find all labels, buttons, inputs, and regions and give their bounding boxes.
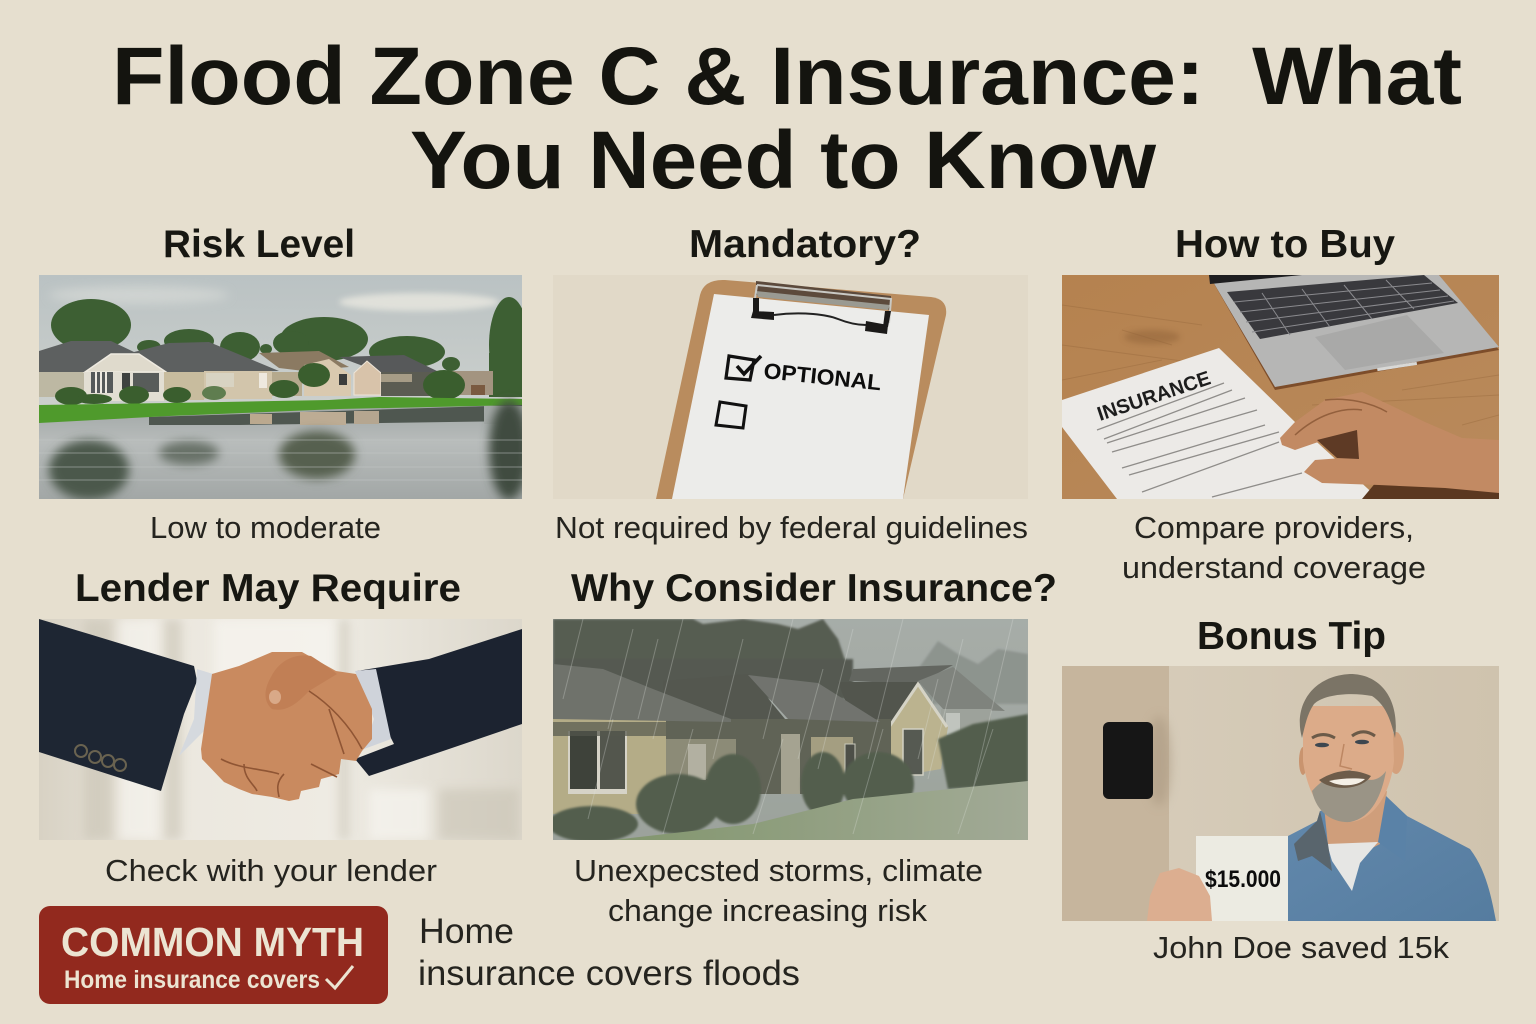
caption: not required: Not required by federal guidelines xyxy=(555,510,1028,545)
heading: mandatory: Mandatory? xyxy=(689,223,921,266)
heading: bonus tip: Bonus Tip xyxy=(1197,615,1386,658)
photo: lakeside houses xyxy=(39,275,522,499)
right sleeve xyxy=(355,629,522,776)
lawn xyxy=(39,397,522,423)
text: myth explanation: insurance covers floods xyxy=(418,954,800,993)
left sleeve xyxy=(39,619,213,791)
label: insurance: INSURANCE xyxy=(1095,367,1213,426)
photo: handshake xyxy=(39,619,522,840)
title xyxy=(112,31,1462,206)
cuff buttons xyxy=(75,745,126,771)
hand xyxy=(1147,868,1212,921)
title: Flood Zone C & Insurance: What xyxy=(112,31,1462,122)
left house xyxy=(553,664,731,814)
panel: risk level xyxy=(39,223,529,545)
background trees xyxy=(553,619,1028,704)
label: optional: OPTIONAL xyxy=(762,358,882,395)
photo: storm over houses xyxy=(553,619,1028,840)
clip xyxy=(751,281,891,334)
clipboard board xyxy=(656,280,946,499)
panel: bonus tip xyxy=(1062,615,1499,965)
man xyxy=(1288,674,1496,921)
face xyxy=(1303,706,1394,822)
reflections at bank xyxy=(149,405,522,425)
heading: how to buy: How to Buy xyxy=(1175,223,1395,266)
icon: check mark xyxy=(326,966,353,988)
photo: man with flood sensor and check xyxy=(1062,666,1499,921)
panel: why consider insurance xyxy=(548,567,1057,928)
laptop xyxy=(1209,275,1499,390)
checked box xyxy=(726,356,761,380)
photo: clipboard optional xyxy=(656,280,946,499)
wall device xyxy=(1103,722,1153,799)
clasped hands xyxy=(201,652,372,801)
panel: mandatory xyxy=(553,223,1028,545)
shirt xyxy=(1288,796,1496,921)
callout: common myth badge xyxy=(39,906,388,1004)
eyes xyxy=(1315,740,1369,747)
heading: why consider insurance: Why Consider Insurance? xyxy=(571,567,1057,610)
rain xyxy=(563,619,1013,834)
water reflections xyxy=(49,400,529,500)
shrubs xyxy=(55,363,465,405)
right background house xyxy=(838,665,1005,739)
caption: compare providers: Compare providers, xyxy=(1134,510,1414,545)
caption: check with your lender: Check with your lender xyxy=(105,853,437,888)
heading: lender may require: Lender May Require xyxy=(75,567,461,610)
heading: risk level: Risk Level xyxy=(163,223,355,266)
ears xyxy=(1388,732,1404,774)
panel: how to buy xyxy=(1062,223,1499,585)
hand xyxy=(1280,392,1499,499)
center house xyxy=(663,674,891,794)
right gabled house xyxy=(885,684,948,777)
brows xyxy=(1312,732,1375,738)
myth subtext: Home insurance covers xyxy=(64,966,320,994)
beard xyxy=(1312,770,1386,822)
caption: unexpected storms: change increasing risk xyxy=(608,893,928,928)
hedge and bushes xyxy=(548,714,1028,842)
caption: unexpected storms xyxy=(574,853,983,928)
caption: low to moderate: Low to moderate xyxy=(150,510,381,545)
caption: compare providers xyxy=(1122,510,1426,585)
text: myth explanation: Home xyxy=(419,912,514,951)
lawn xyxy=(613,781,1028,840)
neck xyxy=(1324,791,1387,856)
check note xyxy=(1196,836,1288,921)
photo: insurance paper and laptop xyxy=(1062,275,1499,499)
text: myth explanation xyxy=(418,912,800,993)
myth heading: COMMON MYTH xyxy=(61,919,364,965)
panel: lender may require xyxy=(39,567,522,888)
caption: john doe saved: John Doe saved 15k xyxy=(1153,930,1450,965)
document xyxy=(1062,348,1379,499)
tee xyxy=(1327,842,1378,891)
caption: unexpected storms: Unexpecsted storms, climate xyxy=(574,853,983,888)
title: You Need to Know xyxy=(410,115,1156,206)
empty box xyxy=(716,402,746,428)
lake water xyxy=(39,405,522,499)
amount: $15.000 xyxy=(1205,866,1281,893)
collars xyxy=(1294,811,1332,871)
hair xyxy=(1300,674,1396,738)
houses xyxy=(39,341,493,401)
caption: compare providers: understand coverage xyxy=(1122,550,1426,585)
trees xyxy=(51,297,529,397)
